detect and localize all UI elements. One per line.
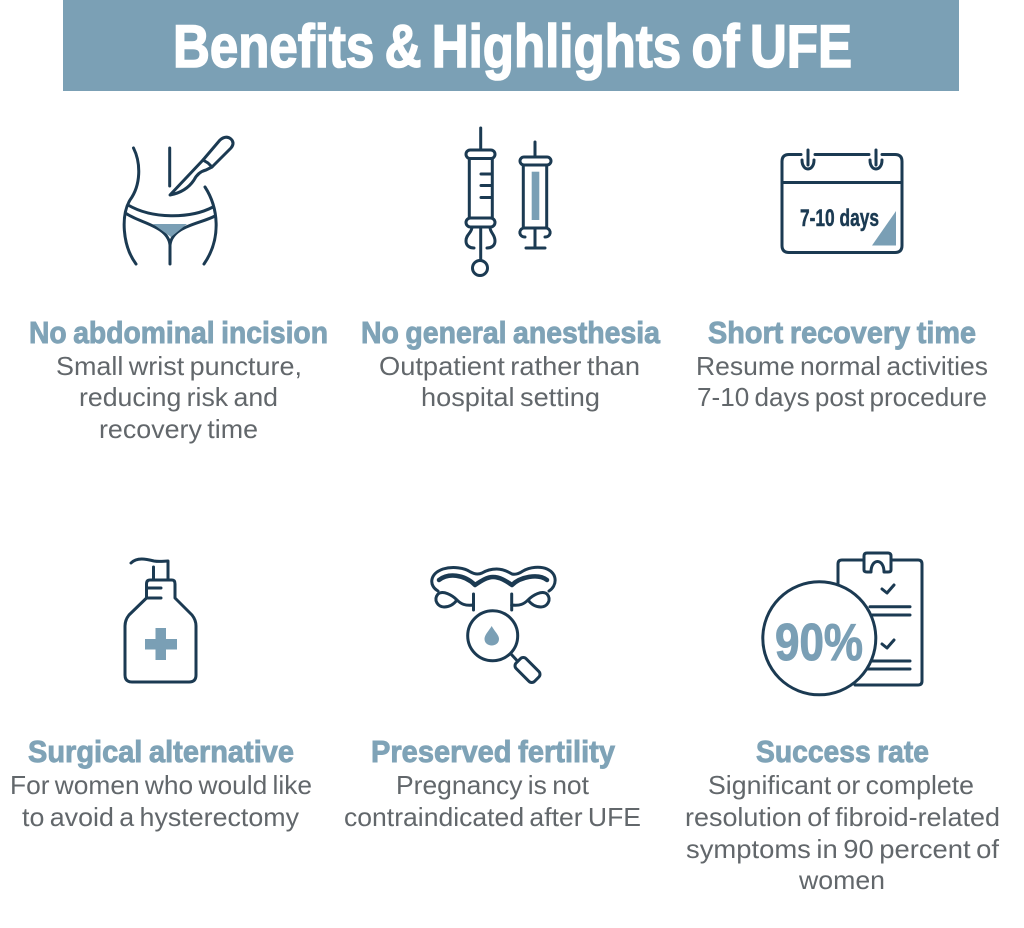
description: contraindicated after UFE <box>344 802 641 832</box>
description: Small wrist puncture, <box>56 351 302 381</box>
description: Pregnancy is not <box>396 770 590 800</box>
description: to avoid a hysterectomy <box>22 802 299 832</box>
description <box>696 351 988 412</box>
description: Outpatient rather than <box>379 351 640 381</box>
heading: Short recovery time <box>708 315 976 350</box>
description: Significant or complete <box>708 770 974 800</box>
icon: clipboard with 90 percent: 90% <box>775 614 863 672</box>
icon: calendar <box>782 150 902 252</box>
description: 7-10 days post procedure <box>697 382 987 412</box>
description: Resume normal activities <box>696 351 988 381</box>
icon: calendar: 7-10 days <box>800 205 879 232</box>
heading: No general anesthesia <box>361 315 661 350</box>
title banner <box>63 0 959 91</box>
heading: No abdominal incision <box>29 315 328 350</box>
description: reducing risk and <box>79 382 278 412</box>
heading: Surgical alternative <box>28 734 294 769</box>
icon: uterus and magnifier <box>432 567 555 684</box>
description: For women who would like <box>10 770 312 800</box>
description: women <box>798 865 885 895</box>
panel: preserved fertility <box>344 567 641 832</box>
icon: syringes <box>466 128 551 276</box>
description: hospital setting <box>421 382 600 412</box>
panel: no general anesthesia <box>361 128 661 412</box>
description <box>344 770 641 832</box>
heading: Success rate <box>756 734 929 769</box>
description: symptoms in 90 percent of <box>686 834 1000 864</box>
heading: Preserved fertility <box>371 734 616 769</box>
panel: short recovery time <box>696 150 988 412</box>
description <box>56 351 302 444</box>
title banner: Benefits & Highlights of UFE <box>173 13 852 80</box>
description: recovery time <box>99 414 258 444</box>
description: resolution of fibroid-related <box>685 802 1000 832</box>
description <box>10 770 312 832</box>
panel: no abdominal incision <box>29 137 328 444</box>
icon: torso and scalpel <box>124 137 233 264</box>
panel: success rate <box>685 553 1000 895</box>
icon: pump bottle <box>125 559 196 682</box>
description <box>379 351 640 412</box>
description <box>685 770 1000 895</box>
icon: clipboard with 90 percent <box>763 553 922 695</box>
panel: surgical alternative <box>10 559 312 832</box>
